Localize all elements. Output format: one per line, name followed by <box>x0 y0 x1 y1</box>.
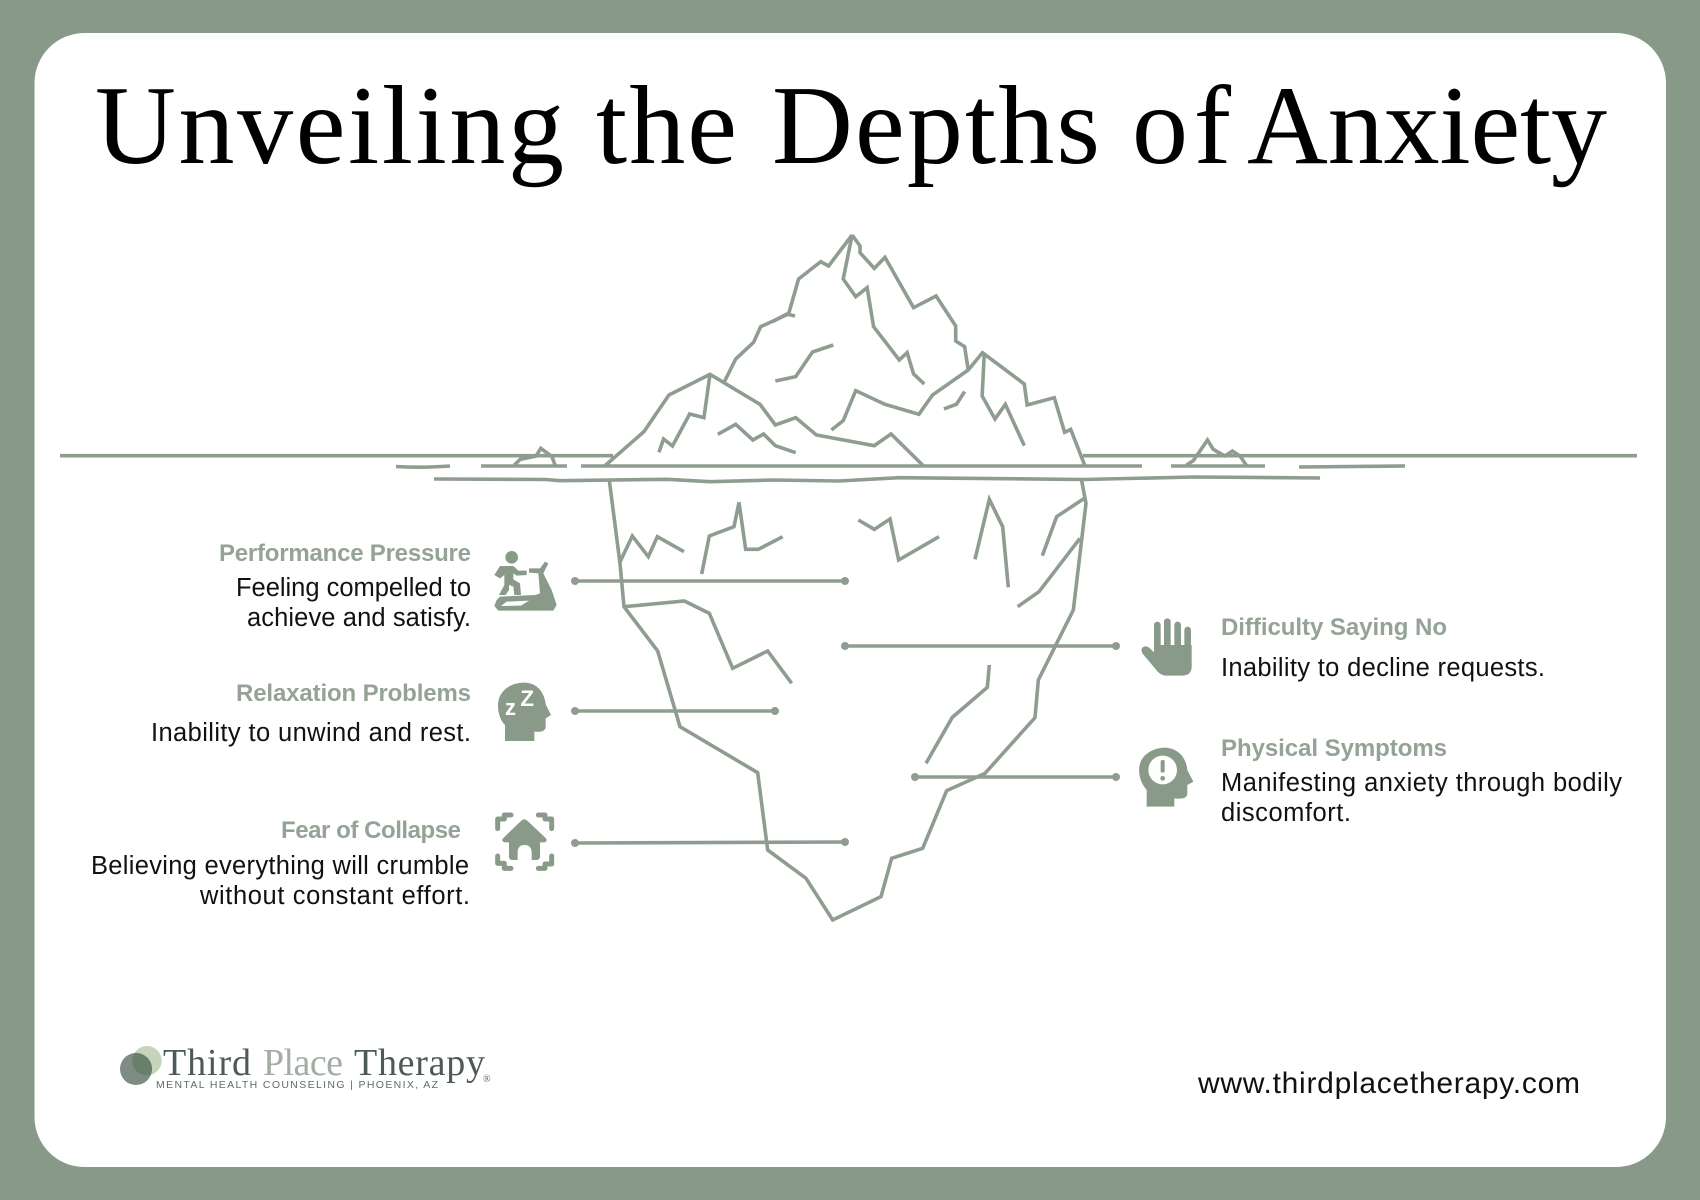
heading: Fear of Collapse <box>281 817 461 844</box>
icon: sleeping head: Z <box>520 686 534 711</box>
description: Manifesting anxiety through bodily <box>1221 769 1622 797</box>
iceberg below water <box>609 481 1086 920</box>
icon: house with corner marks <box>498 815 552 868</box>
small iceberg right <box>1186 440 1247 466</box>
logo wordmark: ® <box>483 1074 491 1085</box>
website url: www.thirdplacetherapy.com <box>1197 1067 1580 1100</box>
description: achieve and satisfy. <box>247 604 471 632</box>
text block: relaxation problems <box>151 680 471 747</box>
text block: fear of collapse <box>91 817 470 910</box>
icon: sleeping head: z <box>505 695 516 720</box>
title: the <box>596 64 737 188</box>
logo circles <box>120 1046 162 1085</box>
heading: Performance Pressure <box>219 540 471 567</box>
logo wordmark: Third <box>163 1042 251 1084</box>
description <box>1221 769 1622 827</box>
small iceberg left <box>514 448 555 465</box>
icon: sleeping head <box>498 683 551 741</box>
iceberg above water <box>605 235 1085 466</box>
title: Unveiling <box>95 64 564 188</box>
text block: difficulty saying no <box>1221 614 1545 682</box>
icon: treadmill <box>494 551 557 611</box>
description <box>91 852 470 910</box>
title: Depths <box>772 64 1100 188</box>
connector: performance pressure <box>571 577 849 585</box>
logo wordmark: Therapy <box>354 1042 485 1084</box>
heading: Physical Symptoms <box>1221 735 1447 762</box>
connector: fear of collapse <box>571 838 849 847</box>
logo wordmark: Place <box>263 1042 343 1084</box>
description <box>236 574 471 632</box>
description: Feeling compelled to <box>236 574 471 602</box>
icon: raised hand <box>1141 622 1192 676</box>
connector: difficulty saying no <box>841 642 1120 650</box>
description: discomfort. <box>1221 799 1351 827</box>
title: Anxiety <box>1247 64 1607 188</box>
heading: Relaxation Problems <box>236 680 471 707</box>
description: Believing everything will crumble <box>91 852 469 880</box>
heading: Difficulty Saying No <box>1221 614 1447 641</box>
text block: performance pressure <box>219 540 471 632</box>
logo wordmark <box>163 1042 491 1085</box>
logo tagline: MENTAL HEALTH COUNSELING | PHOENIX, AZ <box>156 1079 439 1091</box>
description: without constant effort. <box>199 882 470 910</box>
connector: physical symptoms <box>911 773 1120 781</box>
description: Inability to decline requests. <box>1221 654 1545 682</box>
icon: head with exclamation <box>1139 748 1193 807</box>
title <box>95 64 1607 188</box>
logo: Third Place Therapy <box>120 1046 490 1090</box>
connector: relaxation problems <box>571 707 779 715</box>
text block: physical symptoms <box>1221 735 1622 827</box>
title: of <box>1132 64 1232 188</box>
water surface lines <box>60 456 1637 482</box>
description: Inability to unwind and rest. <box>151 719 471 747</box>
